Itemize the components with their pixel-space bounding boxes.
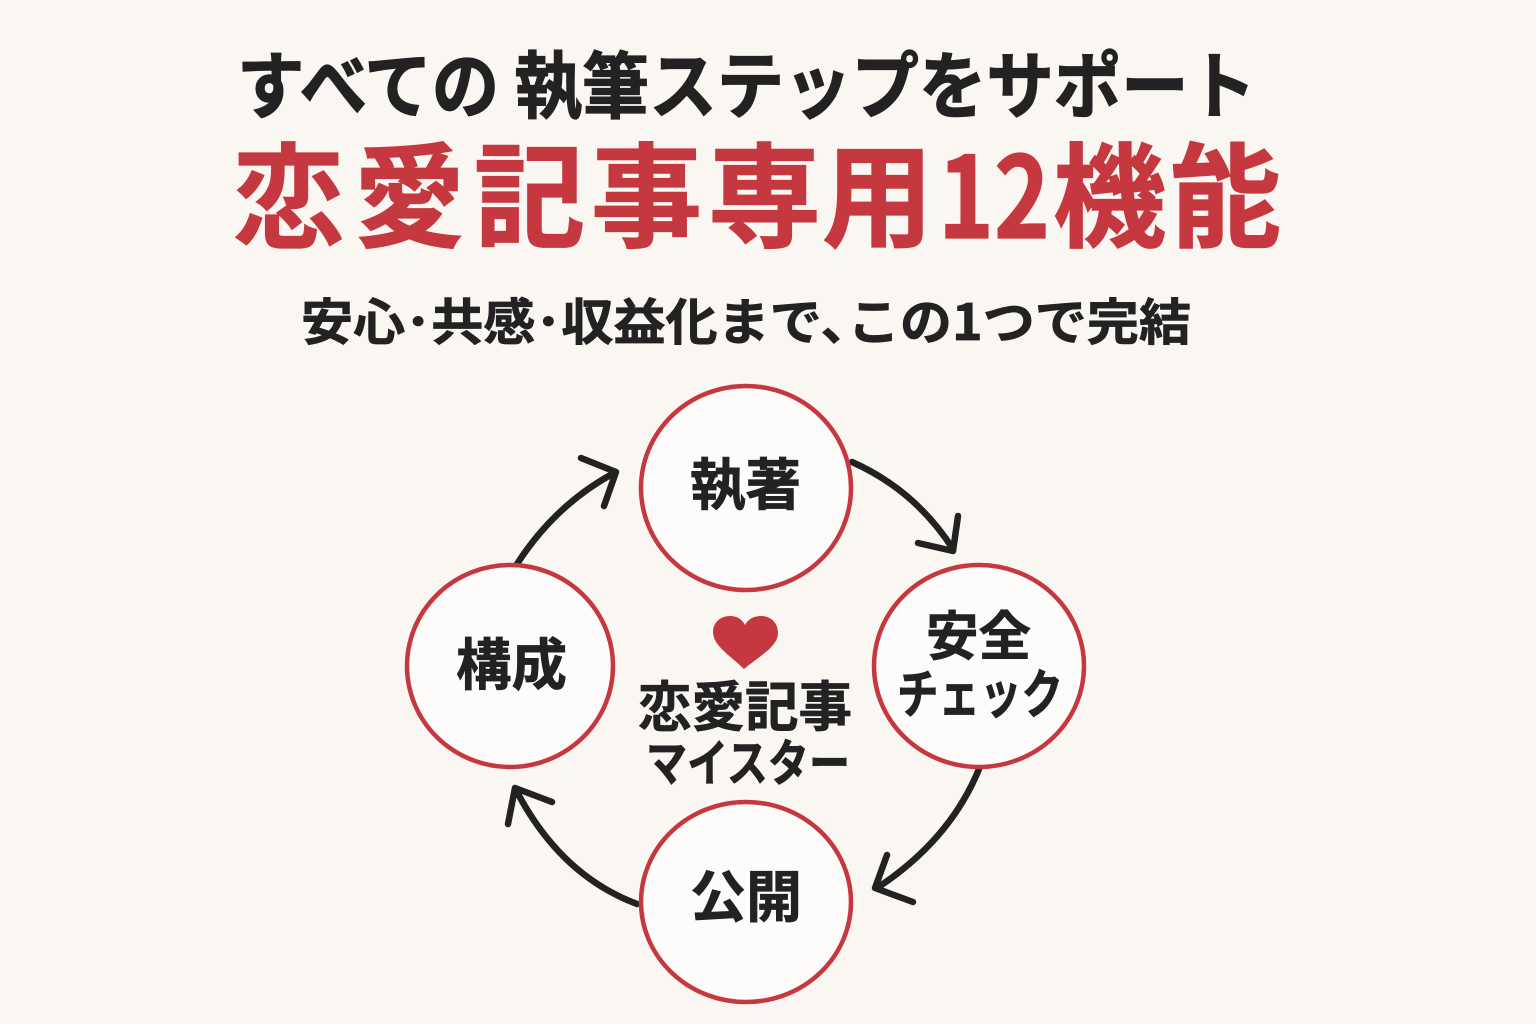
center label: マイスター xyxy=(646,724,850,796)
title: main red heading: 記 xyxy=(474,107,585,271)
icon: heart xyxy=(713,616,778,669)
node: safety check xyxy=(874,565,1084,767)
title: main red heading: 愛 xyxy=(354,107,465,271)
arrow: publish to structure xyxy=(508,788,637,904)
arrow: safety check to publish xyxy=(875,769,979,902)
title: main red heading: 専 xyxy=(708,107,821,271)
subtitle: 安心･共感･収益化まで､この1つで完結 xyxy=(301,283,1191,355)
arrow: writing to safety check xyxy=(852,462,958,551)
title: main red heading: 事 xyxy=(591,107,702,271)
title: main red heading: 機 xyxy=(1053,107,1166,271)
node: publish: 公開 xyxy=(690,853,802,934)
node: writing: 執著 xyxy=(690,441,801,522)
title: main red heading: 能 xyxy=(1170,107,1281,271)
node: structure: 構成 xyxy=(456,621,567,702)
arrow: structure to writing xyxy=(517,458,616,564)
node: writing xyxy=(641,386,851,590)
node: safety check: 安全 xyxy=(926,595,1031,671)
node: structure xyxy=(407,565,613,767)
cycle diagram xyxy=(407,386,1084,1002)
title: main red heading xyxy=(233,107,1281,271)
title: main red heading: 12 xyxy=(938,107,1050,271)
title: main red heading: 用 xyxy=(822,107,933,271)
title: lead line: すべての 執筆ステップをサポート xyxy=(237,28,1256,134)
node: safety check: チェック xyxy=(897,653,1063,729)
title: main red heading: 恋 xyxy=(233,107,344,271)
center label xyxy=(638,663,852,796)
node: publish xyxy=(641,802,851,1002)
center label: 恋愛記事 xyxy=(638,663,852,742)
